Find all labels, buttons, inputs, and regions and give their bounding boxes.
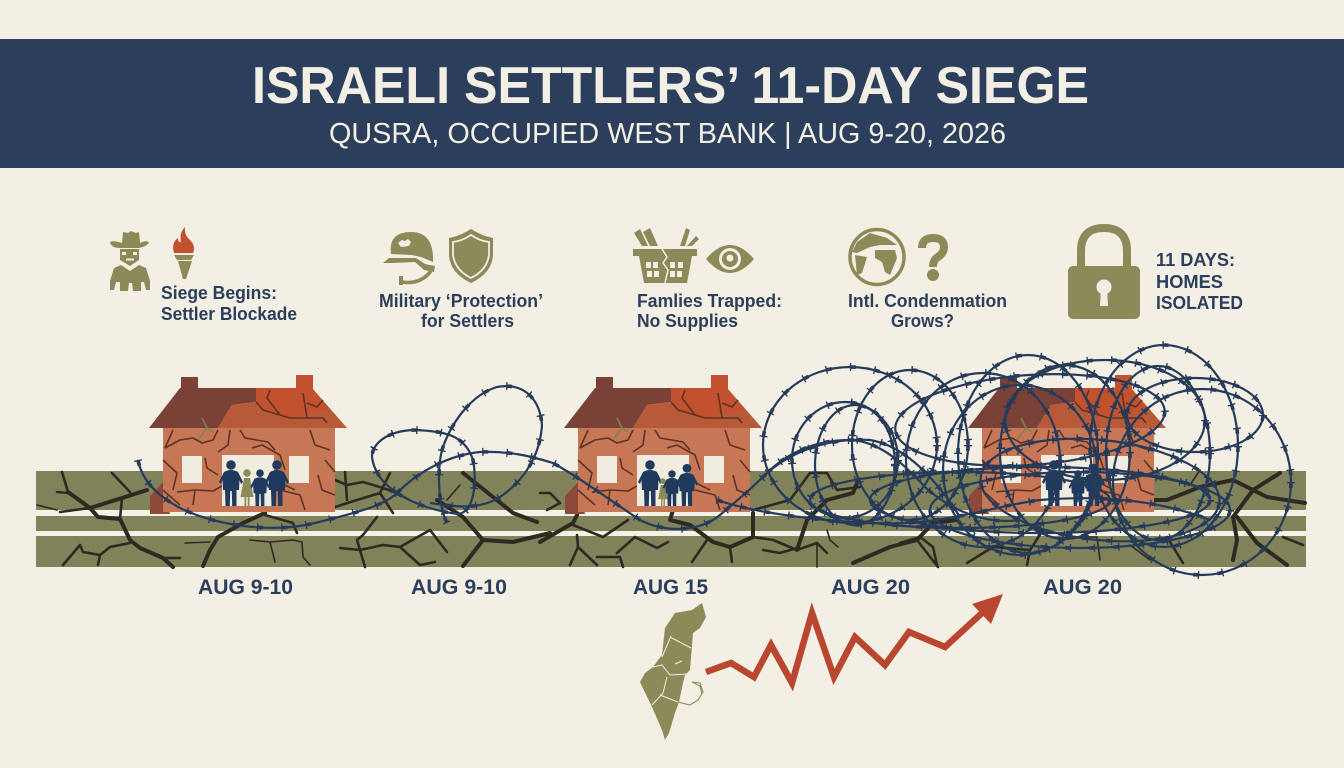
icon: globe — [850, 230, 904, 284]
red escalation arrow — [706, 594, 1003, 683]
label: Siege Begins: — [161, 282, 277, 303]
family 2 — [638, 460, 698, 506]
house 3 with family — [968, 375, 1166, 514]
label — [848, 290, 1007, 331]
icon: settler with hat — [110, 231, 150, 291]
subtitle: QUSRA, OCCUPIED WEST BANK | AUG 9-20, 2026 — [329, 118, 1006, 150]
panel: homes isolated — [1068, 228, 1243, 319]
panel: siege begins — [110, 227, 297, 324]
label — [1156, 249, 1243, 313]
date labels: AUG 15 — [633, 576, 708, 599]
icon: shield — [449, 229, 493, 283]
icon: helmet — [383, 232, 435, 285]
barbed wire coils — [138, 345, 1291, 575]
panel: military protection — [379, 229, 543, 331]
house 1 with family — [149, 375, 347, 514]
title banner — [0, 39, 1344, 168]
date labels: AUG 9-10 — [198, 576, 293, 599]
label — [379, 290, 543, 331]
label: ISOLATED — [1156, 292, 1243, 313]
date labels: AUG 20 — [1043, 576, 1122, 599]
label — [637, 290, 782, 331]
icon: torch — [173, 227, 194, 279]
family 3 — [1042, 460, 1105, 506]
label: Famlies Trapped: — [637, 290, 782, 311]
house 2 with family — [564, 375, 762, 514]
cracked ground timeline — [36, 470, 1306, 567]
title: ISRAELI SETTLERS’ 11-DAY SIEGE — [252, 57, 1089, 115]
icon: eye — [706, 245, 754, 273]
date labels — [198, 576, 1122, 599]
label: for Settlers — [421, 310, 514, 331]
map — [640, 603, 706, 740]
date labels: AUG 9-10 — [411, 576, 507, 599]
label: Intl. Condenmation — [848, 290, 1007, 311]
label — [161, 282, 297, 324]
label: No Supplies — [637, 310, 738, 331]
date labels: AUG 20 — [831, 576, 910, 599]
label: 11 DAYS: — [1156, 249, 1235, 270]
ground cracks — [37, 470, 1305, 567]
label: Military ‘Protection’ — [379, 290, 543, 311]
panel: families trapped — [633, 228, 782, 331]
label: Settler Blockade — [161, 303, 297, 324]
label: Grows? — [891, 310, 954, 331]
label: HOMES — [1156, 271, 1223, 292]
icon: broken basket — [633, 228, 699, 283]
family 1 — [219, 460, 289, 506]
icon: padlock — [1068, 228, 1140, 319]
panel: condemnation — [848, 230, 1007, 331]
icon: question mark — [922, 238, 944, 281]
